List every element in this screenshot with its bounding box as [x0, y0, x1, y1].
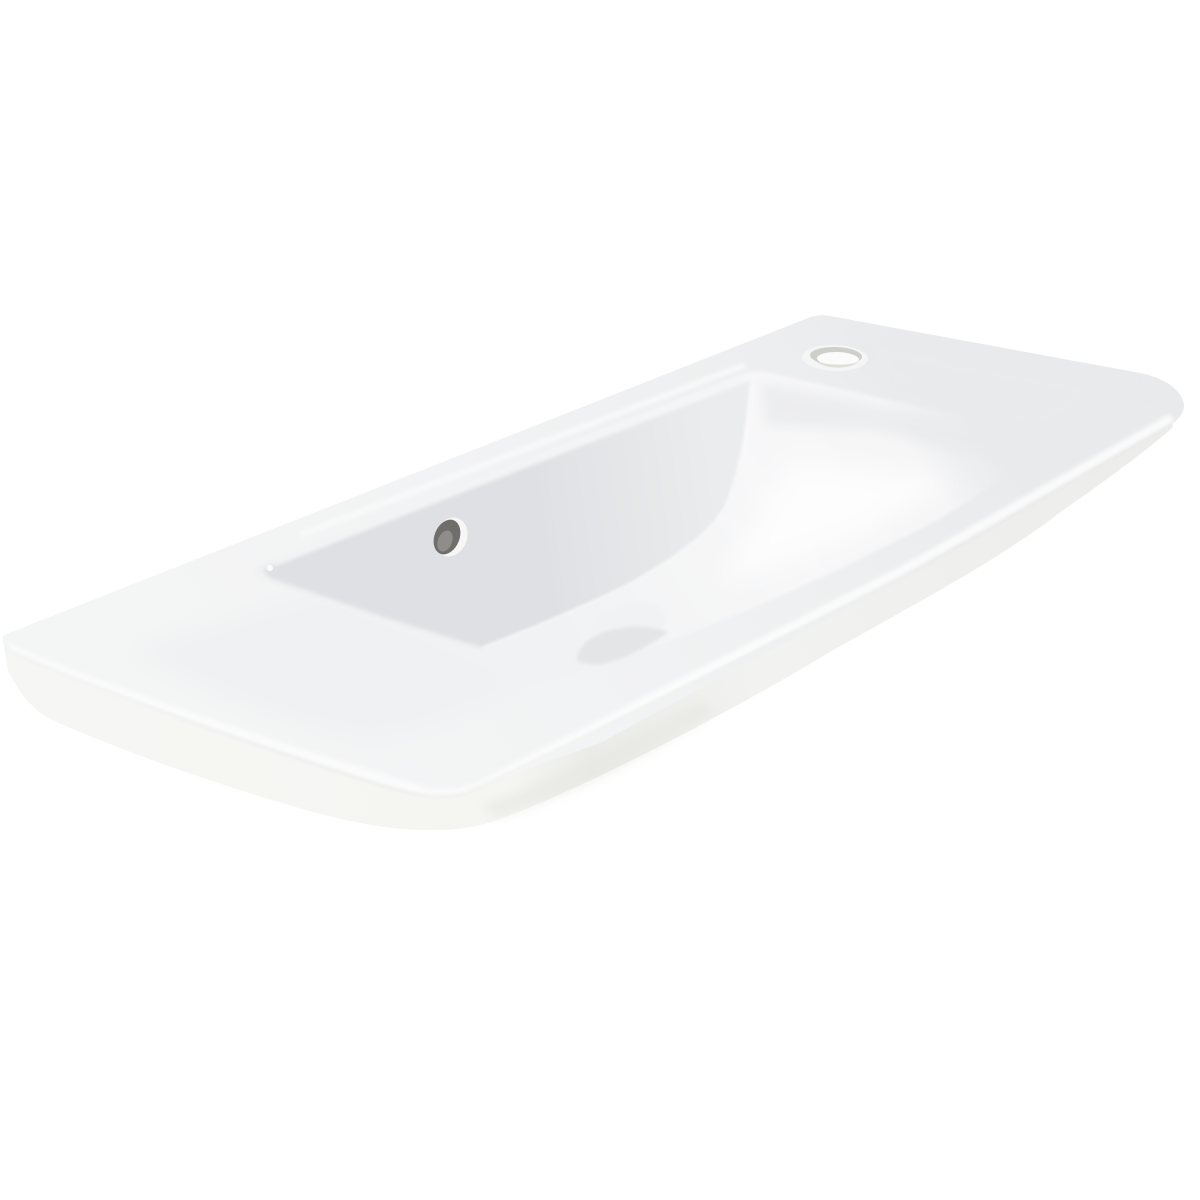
- wall top bright band: [275, 376, 745, 562]
- corner glint: [267, 565, 273, 571]
- rim bevel front highlight: [492, 416, 1173, 778]
- icon: tap hole: [802, 344, 868, 372]
- icon: drain hole: [577, 604, 668, 664]
- back ridge highlight: [668, 366, 742, 394]
- sink underside body: [4, 410, 1176, 830]
- icon: overflow hole: [429, 512, 473, 562]
- sink top rim surface: [3, 315, 1184, 797]
- body shadow near front curve: [480, 700, 715, 818]
- wall crease highlight: [483, 385, 752, 648]
- slope upper shade: [760, 382, 1015, 462]
- rim front edge line: [5, 424, 1172, 796]
- right rim shade: [830, 320, 1150, 450]
- slope highlight: [720, 460, 950, 585]
- basin slope floor: [252, 372, 1029, 682]
- plateau depression shade: [130, 590, 530, 738]
- basin back wall: [262, 380, 750, 648]
- illustration: white ceramic sink: [3, 315, 1184, 830]
- basin bowl: [252, 372, 1029, 682]
